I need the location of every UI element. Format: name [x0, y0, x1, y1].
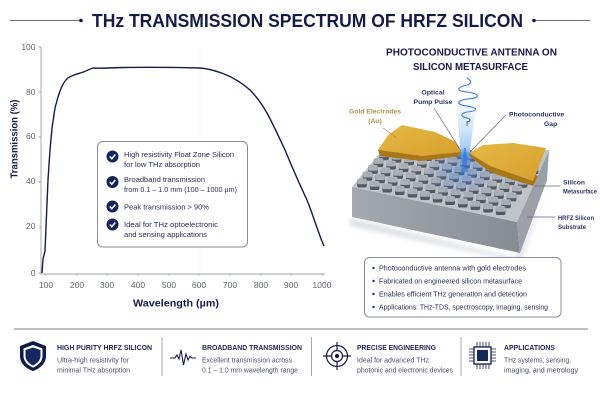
callout text: Broadband transmission: [124, 175, 205, 184]
feature text: Ultra-high resistivity for: [57, 358, 130, 364]
gold electrode: right: [469, 143, 546, 186]
label: gold electrodes: Gold Electrodes: [349, 108, 401, 116]
y-axis tick labels: 40: [26, 176, 36, 186]
feature title: APPLICATIONS: [504, 345, 555, 352]
line chart: transmission spectrum: [8, 42, 332, 310]
heading: antenna panel: SILICON METASURFACE: [413, 62, 528, 73]
y-axis tick labels: 20: [26, 221, 36, 231]
x-axis tick labels: 800: [254, 280, 268, 290]
x-axis tick labels: 1000: [313, 280, 332, 290]
gold electrode: left: [378, 125, 462, 161]
x-axis tick labels: 900: [284, 280, 298, 290]
icon: shield: [20, 341, 46, 371]
label: HRFZ silicon substrate: Substrate: [558, 224, 586, 231]
feature text: Excellent transmission across: [202, 358, 293, 364]
x-axis tick labels: 200: [70, 280, 84, 290]
feature text: 0.1 – 1.0 mm wavelength range: [202, 368, 298, 374]
title: THz TRANSMISSION SPECTRUM OF HRFZ SILICON: [92, 10, 523, 31]
metasurface pillars: [357, 138, 538, 215]
heading: antenna panel: [386, 48, 557, 73]
x-axis tick labels: 700: [223, 280, 237, 290]
label: HRFZ silicon substrate: [558, 215, 594, 231]
shadow under substrate: [350, 196, 545, 262]
pump pulse wave: [459, 78, 478, 126]
feature: broadband transmission: [170, 345, 302, 374]
label: optical pump pulse: Optical: [421, 90, 445, 96]
panel: key properties callout: [98, 142, 248, 247]
chart axes: [38, 47, 325, 276]
feature text: Ideal for advanced THz: [357, 358, 430, 364]
substrate: left face: [352, 187, 520, 253]
bottom strip dividers: [14, 329, 588, 376]
panel: antenna notes callout: [364, 258, 561, 317]
notes text: Photoconductive antenna with gold electrodes: [379, 264, 526, 272]
feature text: minimal THz absorption: [57, 368, 130, 374]
feature title: HIGH PURITY HRFZ SILICON: [57, 345, 152, 352]
label: photoconductive gap: Gap: [544, 121, 557, 128]
notes text: Enables efficient THz generation and detection: [379, 290, 527, 298]
label: silicon metasurface: [563, 180, 597, 196]
label: silicon metasurface: Silicon: [563, 180, 585, 186]
y-axis tick labels: 60: [26, 131, 36, 141]
x-axis title: Wavelength (µm): [133, 298, 219, 310]
feature text: photonic and electronic devices: [357, 368, 454, 374]
feature text: imaging, and metrology: [504, 368, 579, 374]
feature: applications: [469, 342, 579, 374]
spectrum curve: [42, 67, 324, 273]
feature text: THz systems, sensing,: [504, 358, 571, 364]
label: silicon metasurface: Metasurface: [563, 188, 597, 196]
callout text: Ideal for THz optoelectronic: [124, 220, 218, 229]
callout text: from 0.1 – 1.0 mm (100 – 1000 µm): [124, 185, 237, 194]
bullets: [372, 267, 375, 308]
x-axis tick labels: 400: [131, 280, 145, 290]
notes text: Applications: THz-TDS, spectroscopy, imaging, sensing: [379, 302, 548, 312]
x-axis tick labels: 500: [162, 280, 176, 290]
label: HRFZ silicon substrate: HRFZ Silicon: [558, 215, 594, 222]
icon: microchip: [469, 342, 496, 369]
feature text: [504, 358, 579, 374]
x-axis tick labels: 600: [192, 280, 206, 290]
substrate: top surface: [352, 150, 549, 222]
callout text: for low THz absorption: [124, 160, 200, 169]
feature text: [57, 358, 130, 374]
feature: high purity HRFZ silicon: [20, 341, 152, 374]
heading: antenna panel: PHOTOCONDUCTIVE ANTENNA ON: [386, 48, 557, 58]
callout text: High resistivity Float Zone Silicon: [124, 150, 234, 159]
feature title: BROADBAND TRANSMISSION: [202, 345, 302, 352]
feature text: [202, 358, 298, 374]
callout text: and sensing applications: [124, 230, 207, 239]
icon: check 3: [106, 200, 118, 212]
icon: check 4: [106, 218, 118, 230]
icon: pulse wave: [170, 350, 196, 365]
label: photoconductive gap: Photoconductive: [509, 112, 564, 118]
callout text: Peak transmission > 90%: [124, 202, 210, 212]
leader lines: [383, 108, 560, 217]
y-axis title: Transmission (%): [8, 100, 20, 178]
x-axis tick labels: 300: [100, 280, 114, 290]
diagram: photoconductive antenna on silicon metasurface: [349, 78, 597, 262]
label: gold electrodes: (Au): [368, 118, 382, 125]
notes text: [379, 264, 548, 312]
feature: precise engineering: [323, 342, 454, 374]
substrate: right face: [517, 150, 549, 253]
y-axis tick labels: [21, 42, 36, 278]
optical pump beam: [456, 98, 477, 158]
y-axis tick labels: 80: [26, 87, 36, 97]
label: optical pump pulse: Pump Pulse: [414, 99, 453, 106]
x-axis tick labels: [39, 280, 332, 290]
feature text: [357, 358, 454, 374]
y-axis tick labels: 0: [31, 268, 36, 278]
icon: check 1: [106, 150, 118, 162]
x-axis tick labels: 100: [39, 280, 53, 290]
y-axis tick labels: 100: [21, 42, 36, 52]
feature title: PRECISE ENGINEERING: [357, 345, 437, 352]
notes text: Fabricated on engineered silicon metasurface: [379, 276, 522, 286]
callout text: [124, 150, 237, 239]
icon: check 2: [106, 176, 118, 188]
icon: crosshair target: [323, 342, 351, 370]
